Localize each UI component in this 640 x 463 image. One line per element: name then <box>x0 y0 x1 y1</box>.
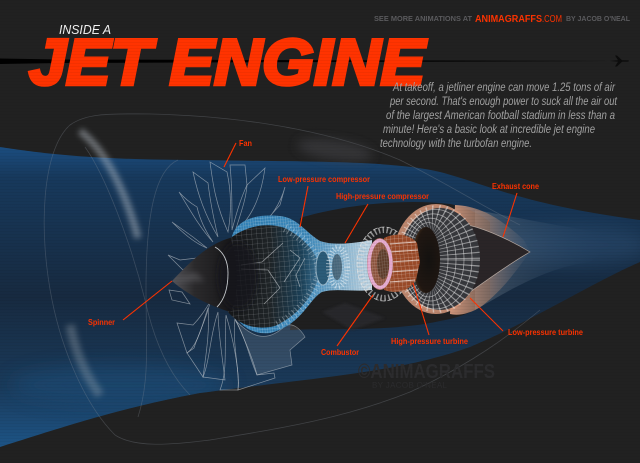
watermark: BY JACOB O'NEAL <box>372 381 448 390</box>
fan blades <box>168 162 305 390</box>
label: low-pressure compressor: Low-pressure compressor <box>278 174 371 184</box>
label: combustor: Combustor <box>321 347 360 357</box>
low pressure turbine <box>393 204 480 314</box>
exhaust cone <box>450 205 530 315</box>
title: JET ENGINE <box>29 26 427 98</box>
top credit line: BY JACOB O'NEAL <box>566 14 630 23</box>
blue airflow <box>0 147 640 447</box>
combustor pink ring <box>367 238 393 290</box>
inner stator blades <box>241 243 305 304</box>
top credit line: .COM <box>542 13 562 25</box>
label: fan <box>224 138 252 167</box>
top credit line: ANIMAGRAFFS <box>475 13 542 25</box>
label: spinner: Spinner <box>88 317 116 327</box>
label: high-pressure turbine: High-pressure turbine <box>391 336 468 346</box>
exhaust plume <box>475 210 604 310</box>
watermark: ©ANIMAGRAFFS <box>358 361 495 383</box>
intro text: technology with the turbofan engine. <box>380 138 532 150</box>
hub <box>316 251 330 285</box>
label: high-pressure turbine <box>391 283 468 346</box>
label: combustor <box>321 295 373 357</box>
watermark <box>358 361 495 390</box>
label: high-pressure compressor: High-pressure compressor <box>336 191 430 201</box>
top credit line <box>374 13 630 25</box>
label: exhaust cone: Exhaust cone <box>492 181 539 191</box>
nacelle outline <box>44 114 540 444</box>
intro text <box>380 82 618 150</box>
label: low-pressure turbine <box>470 298 583 337</box>
label: low-pressure turbine: Low-pressure turbine <box>508 327 583 337</box>
spinner <box>172 238 258 312</box>
label: spinner <box>88 281 172 327</box>
label: low-pressure compressor <box>278 174 371 227</box>
intro text: minute! Here's a basic look at incredible jet engine <box>383 124 595 136</box>
subtitle: INSIDE A <box>59 23 111 37</box>
flight streak <box>0 58 610 64</box>
icon: plane <box>610 56 629 66</box>
inner cavity <box>228 225 320 328</box>
low and high pressure compressor <box>228 216 372 333</box>
combustor gear ring <box>357 227 411 301</box>
core shading blocks <box>322 303 385 330</box>
label: fan: Fan <box>239 138 252 148</box>
nacelle lip highlights <box>70 131 374 395</box>
label: exhaust cone <box>492 181 539 237</box>
label: high-pressure compressor <box>336 191 430 243</box>
dark core passage <box>290 202 490 330</box>
top credit line: SEE MORE ANIMATIONS AT <box>374 14 472 23</box>
high pressure turbine <box>384 235 420 292</box>
